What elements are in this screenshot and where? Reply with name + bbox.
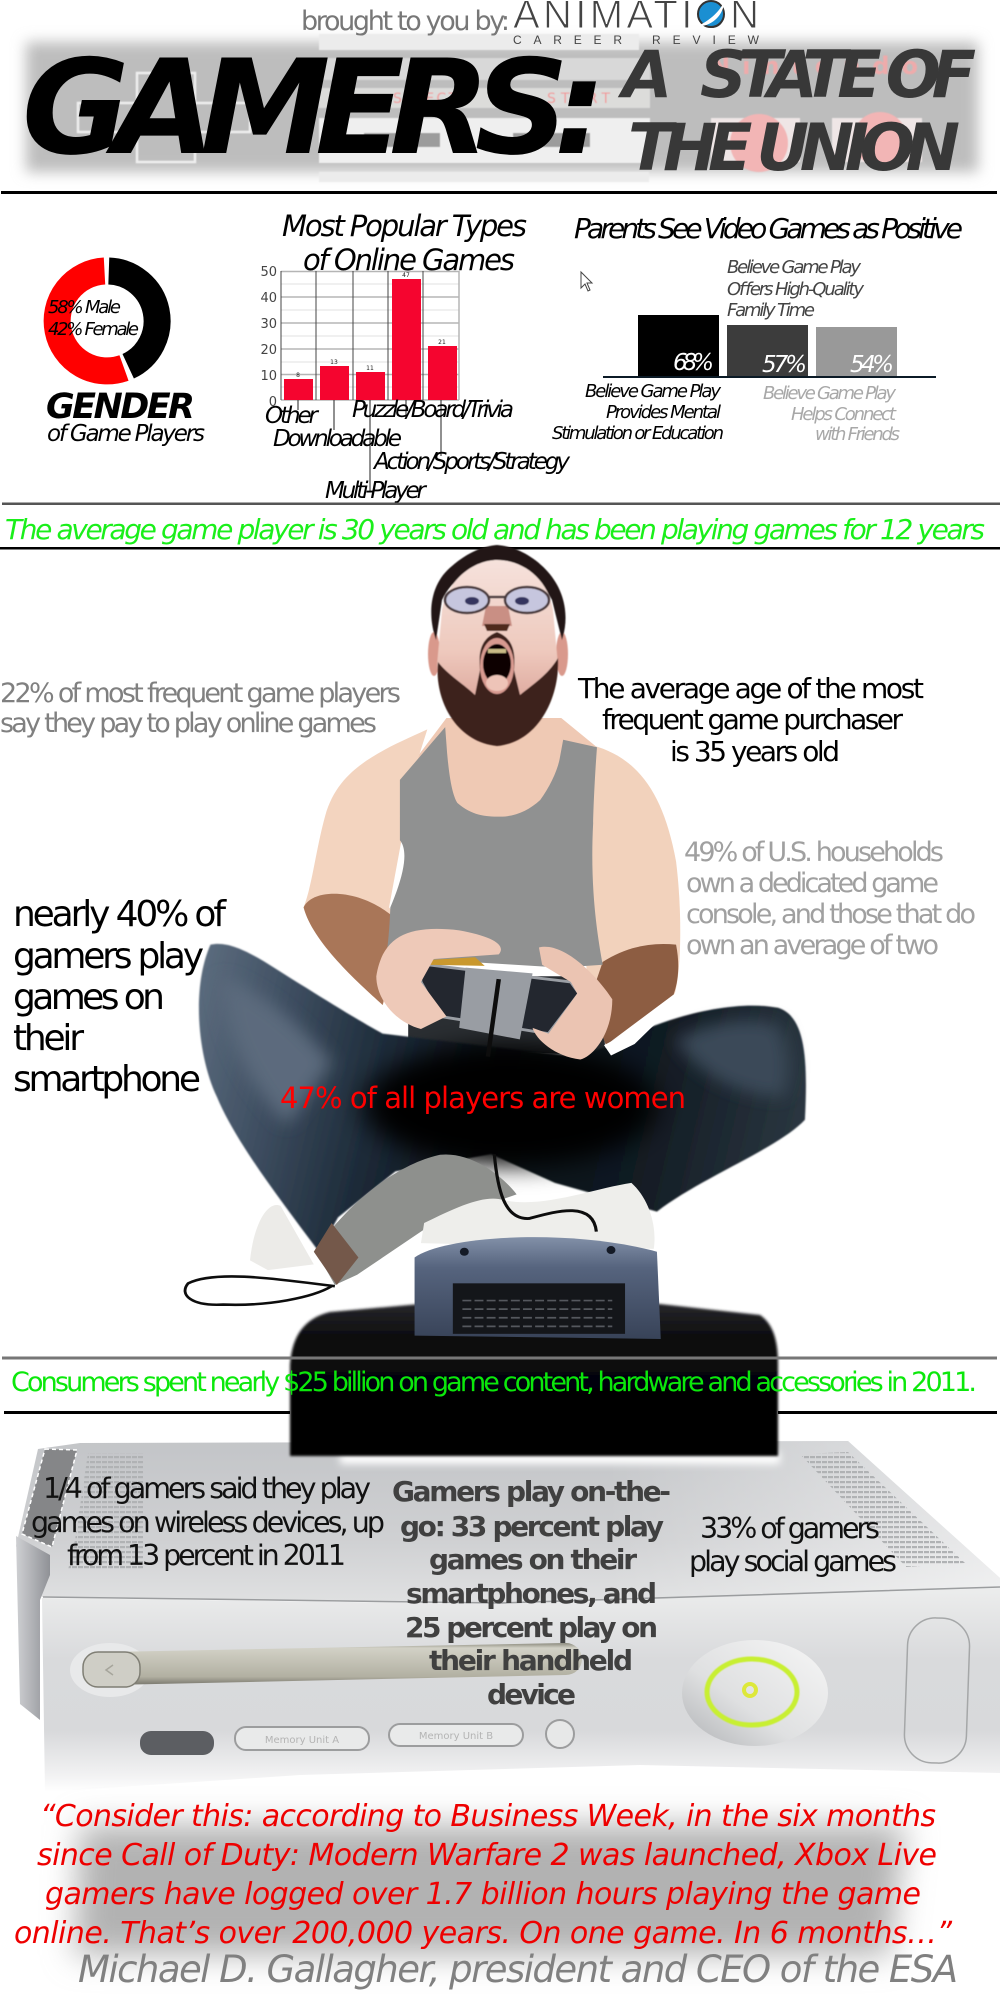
subtitle: A State of the Union: THE UNION (628, 111, 960, 186)
subtitle: A State of the Union: A (617, 38, 672, 113)
fact: gamers on the go: device (487, 1678, 576, 1711)
fact: nearly 40% smartphone: games on (13, 977, 165, 1018)
fact: gamers on the go: their handheld (429, 1644, 633, 1677)
fact: 49% households own console: 49% of U.S. households (684, 837, 944, 868)
fact: nearly 40% smartphone: gamers play (13, 936, 204, 977)
dark button (140, 1731, 214, 1755)
bar chart: 40 (260, 291, 277, 306)
controller cables (185, 1154, 596, 1305)
bars 68 57 54: 54% (850, 352, 894, 378)
bar chart: 21 (438, 339, 446, 346)
bar chart: 30 (260, 317, 277, 332)
fact: gamers on the go: Gamers play on-the- (392, 1475, 671, 1508)
green band: consumers spent: Consumers spent nearly $25 billion on game content, hardware and accessories in 2011. (11, 1367, 977, 1398)
console top (16, 1441, 1000, 1604)
bar chart: 8 (296, 372, 300, 379)
chart heading: Most Popular Types (282, 209, 527, 243)
controller (418, 957, 579, 1057)
fact: 49% households own console: own a dedicated game (686, 868, 939, 899)
fact: 22% pay to play: say they pay to play online games (0, 708, 377, 739)
open mouth (480, 638, 514, 694)
fact: 47% women: 47% of all players are women (280, 1081, 686, 1115)
fact: 49% households own console (684, 837, 976, 961)
photo: gamer with controller (185, 545, 806, 1339)
glasses (445, 587, 549, 613)
right arm (584, 745, 680, 1045)
credit line: brought to you by Animation Career Review: REVIEW (652, 33, 760, 47)
right hand (533, 947, 612, 1059)
bar chart: 20 (260, 343, 277, 358)
bars 68 57 54: 68% (673, 350, 714, 376)
memory unit A: Memory Unit A (265, 1735, 339, 1746)
hair (431, 545, 566, 640)
memory unit B (389, 1724, 523, 1746)
rolled cuff (315, 1154, 517, 1285)
fact: gamers on the go: go: 33 percent play (400, 1510, 664, 1543)
fact: 1/4 wireless devices: games on wireless devices, up (31, 1506, 385, 1539)
memory unit A (235, 1727, 369, 1750)
console front (42, 1588, 1000, 1792)
glow under black console (340, 1452, 780, 1464)
subtitle: A State of the Union: STATE OF (700, 38, 976, 113)
family time label: Family Time (727, 300, 815, 321)
category labels: Puzzle/Board/Trivia (352, 397, 514, 423)
panel: most popular types of online games (260, 209, 570, 504)
mental stimulation label: Stimulation or Education (552, 423, 724, 444)
bars 68 57 54: 57% (762, 352, 807, 378)
dark belly behind hands (408, 976, 606, 1057)
fact: 33% social games (689, 1512, 897, 1578)
donut labels: 58% Male (48, 297, 121, 318)
bar chart: 0 (269, 395, 277, 410)
ears (428, 632, 440, 676)
vents (68, 1452, 965, 1570)
rule below average age band (0, 547, 1000, 550)
face (437, 560, 558, 742)
rule above consumers band (2, 1356, 997, 1360)
pull quote (14, 1799, 952, 1951)
xbox 360 console (16, 1441, 1000, 1792)
connect with friends label: Helps Connect (791, 404, 897, 425)
donut labels (48, 297, 139, 340)
fact: average purchaser age: frequent game purchaser (602, 703, 903, 736)
title banner background: blurred NES controller: Nintendo (710, 52, 918, 80)
pull quote: “Consider this: according to Business Week, in the six months (40, 1799, 936, 1834)
title banner background: blurred NES controller: START (547, 91, 610, 107)
fact: nearly 40% smartphone: smartphone (13, 1059, 201, 1100)
category labels (265, 397, 570, 504)
bars 68 57 54 (603, 315, 936, 378)
bar chart (260, 265, 459, 410)
fact: 49% households own console: console, and those that do (686, 899, 976, 930)
gender heading: GENDER (46, 387, 195, 427)
eyes (465, 597, 529, 605)
family time label (727, 257, 864, 321)
leader lines (298, 400, 441, 492)
fact: gamers on the go: 25 percent play on (405, 1611, 658, 1644)
fact: gamers on the go: smartphones, and (406, 1577, 657, 1610)
mental stimulation label: Provides Mental (606, 402, 721, 423)
credit line: brought to you by Animation Career Review (301, 0, 760, 47)
bar chart: 13 (330, 359, 338, 366)
head (428, 545, 568, 746)
fact: 49% households own console: own an average of two (686, 930, 939, 961)
left hand (376, 929, 501, 1029)
header rule (1, 191, 997, 194)
pull quote: gamers have logged over 1.7 billion hours playing the game (45, 1877, 921, 1912)
n64 cartridge (415, 1237, 661, 1339)
pull quote: online. That’s over 200,000 years. On one game. In 6 months…” (14, 1916, 952, 1951)
beard (438, 632, 558, 746)
tank top (383, 727, 603, 982)
donut labels: 42% Female (48, 319, 139, 340)
fact: 33% social games: 33% of gamers (700, 1512, 880, 1545)
white gap beside knee (604, 1014, 665, 1055)
left shoe (250, 1205, 314, 1270)
category labels: Other (265, 403, 320, 429)
bar chart: 11 (366, 365, 374, 372)
rule below consumers band (4, 1411, 997, 1414)
nose (482, 606, 512, 626)
mental stimulation label: Believe Game Play (585, 381, 721, 402)
memory unit B: Memory Unit B (419, 1731, 493, 1742)
subtitle: A State of the Union (617, 38, 976, 186)
fact: average purchaser age: is 35 years old (670, 735, 840, 768)
fact: gamers on the go: games on their (429, 1543, 637, 1576)
black console under cartridge (290, 1304, 778, 1456)
fact: average purchaser age: The average age of the most (577, 672, 924, 705)
credit line: brought to you by Animation Career Review: brought to you by: (301, 6, 510, 37)
title: GAMERS: GAMERS: (22, 31, 606, 184)
fact: nearly 40% smartphone (13, 894, 227, 1100)
quote attribution: Michael D. Gallagher, president and CEO of the ESA (78, 1948, 958, 1991)
jeans shading (220, 976, 789, 1125)
fact: 1/4 wireless devices (31, 1472, 385, 1572)
fact: gamers on the go (392, 1475, 671, 1711)
fact: 1/4 wireless devices: 1/4 of gamers said they play (43, 1472, 371, 1505)
category labels: Downloadable (273, 426, 402, 452)
fact: nearly 40% smartphone: nearly 40% of (13, 894, 227, 935)
chart heading (282, 209, 527, 277)
fact: 22% pay to play: 22% of most frequent game players (0, 678, 401, 709)
family time label: Believe Game Play (727, 257, 861, 278)
pull quote: since Call of Duty: Modern Warfare 2 was launched, Xbox Live (37, 1838, 937, 1873)
credit line: brought to you by Animation Career Review: CAREER (513, 33, 622, 47)
mental stimulation label (552, 381, 724, 444)
dashed side tag (22, 1449, 77, 1547)
chest and neck (400, 718, 597, 821)
black crotch shadow (364, 1045, 657, 1166)
green band: average game player: The average game player is 30 years old and has been playing games for 12 years (5, 513, 985, 546)
category labels: Multi-Player (325, 478, 428, 504)
power disc (682, 1640, 828, 1746)
fact: 1/4 wireless devices: from 13 percent in 2011 (67, 1539, 346, 1572)
left arm (304, 729, 427, 1005)
connect with friends label: Believe Game Play (763, 383, 896, 404)
disc tray (70, 1643, 582, 1697)
family time label: Offers High-Quality (727, 279, 864, 300)
right oval port (903, 1617, 970, 1764)
fact: nearly 40% smartphone: their (13, 1018, 84, 1059)
donut chart: 58% male 42% female (57, 271, 157, 371)
rule above average age band (2, 502, 1000, 505)
bar chart: 47 (402, 272, 410, 279)
torso and arms (304, 718, 680, 1057)
category labels: Action/Sports/Strategy (372, 449, 570, 475)
gender heading: of Game Players (47, 421, 205, 447)
gamer body, scaled from crop coordinates (185, 718, 806, 1339)
panel: parents see video games as positive (552, 212, 963, 445)
jeans (199, 944, 806, 1252)
fact: 22% pay to play (0, 678, 401, 739)
title banner background: blurred NES controller: SELECT (393, 91, 457, 107)
small circle button (546, 1720, 574, 1748)
gender heading (46, 387, 205, 447)
parents heading: Parents See Video Games as Positive (574, 212, 963, 245)
connect with friends label: with Friends (815, 424, 900, 445)
right shoe (421, 1183, 655, 1249)
fact: 33% social games: play social games (689, 1545, 897, 1578)
title banner background: blurred NES controller (26, 34, 978, 182)
panel: gender donut (46, 271, 205, 447)
connect with friends label (763, 383, 900, 445)
chart heading: of Online Games (303, 243, 515, 277)
bar chart: 10 (260, 369, 277, 384)
bar chart: 50 (260, 265, 277, 280)
console side (16, 1536, 50, 1720)
quote background shadow (75, 1825, 905, 1955)
icon: mouse cursor (581, 272, 592, 291)
fact: average purchaser age (577, 672, 924, 768)
